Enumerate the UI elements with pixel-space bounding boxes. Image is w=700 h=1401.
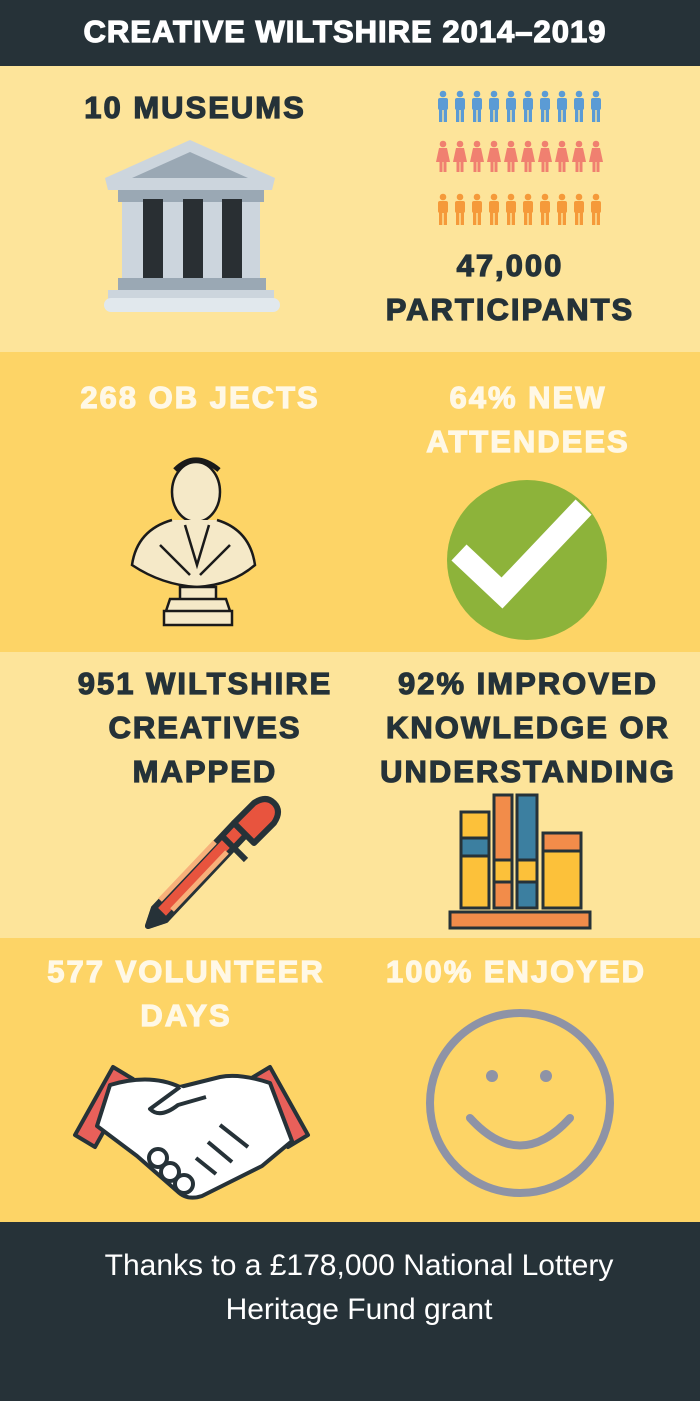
text: 10 museums: 10 MUSEUMS — [84, 90, 306, 125]
text: participants: 47,000 — [457, 248, 563, 283]
text: creatives mapped: MAPPED — [133, 754, 277, 789]
section 3 background — [0, 652, 700, 938]
text: improved knowledge: 92% IMPROVED — [398, 666, 658, 701]
text: volunteer days — [47, 954, 325, 1033]
footer text: Thanks to a £178,000 National Lottery — [105, 1249, 613, 1282]
section 4 background — [0, 938, 700, 1222]
text: volunteer days: 577 VOLUNTEER — [47, 954, 325, 989]
text: creatives mapped: 951 WILTSHIRE — [78, 666, 332, 701]
icon: people rows — [436, 91, 603, 225]
header band — [0, 0, 700, 66]
footer text: Heritage Fund grant — [226, 1293, 492, 1326]
icon: books — [450, 795, 590, 928]
icon: check circle — [447, 480, 607, 640]
icon: museum — [104, 140, 280, 312]
text: improved knowledge — [380, 666, 676, 789]
text: volunteer days: DAYS — [140, 998, 232, 1033]
text: new attendees: 64% NEW — [450, 380, 606, 415]
text: improved knowledge: UNDERSTANDING — [380, 754, 676, 789]
icon: handshake — [75, 1067, 308, 1198]
icon: smiley — [430, 1013, 610, 1193]
text: new attendees: ATTENDEES — [426, 424, 630, 459]
text: participants — [386, 248, 634, 327]
text: creatives mapped: CREATIVES — [108, 710, 302, 745]
text: creatives mapped — [78, 666, 332, 789]
title: CREATIVE WILTSHIRE 2014–2019 — [83, 14, 607, 49]
text: objects: 268 OB JECTS — [80, 380, 320, 415]
text: improved knowledge: KNOWLEDGE OR — [386, 710, 670, 745]
text: participants: PARTICIPANTS — [386, 292, 634, 327]
text: new attendees — [426, 380, 630, 459]
section 1 background — [0, 66, 700, 352]
icon: pencil — [148, 799, 278, 926]
section 2 background — [0, 352, 700, 652]
footer text — [105, 1249, 614, 1326]
footer band — [0, 1222, 700, 1401]
text: enjoyed: 100% ENJOYED — [386, 954, 646, 989]
icon: bust — [132, 460, 255, 625]
